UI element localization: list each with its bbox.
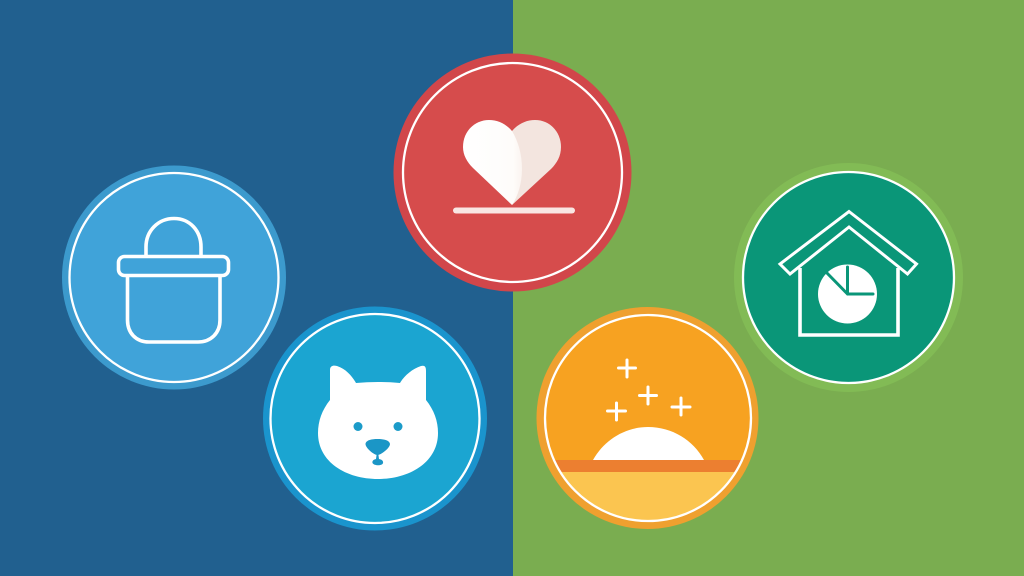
icon: heart badge [394, 54, 632, 292]
icon: basket badge [62, 166, 286, 390]
horizon band [556, 460, 740, 472]
cat eyes [354, 422, 402, 431]
panel: blue left background [0, 0, 513, 576]
icon: house clock badge [734, 163, 963, 392]
clock face [818, 264, 877, 324]
cat head [318, 366, 438, 479]
clock hands [825, 267, 873, 294]
heart left half [463, 120, 522, 205]
icon: cat badge [263, 306, 487, 530]
basket body [128, 276, 220, 342]
panel: green right background [513, 0, 1024, 576]
icon: sunrise badge [536, 307, 758, 529]
cat nose [366, 439, 390, 465]
walls [800, 268, 898, 335]
sun dome [593, 427, 704, 460]
basket handle [146, 218, 201, 256]
roof [780, 212, 916, 274]
sand [562, 472, 734, 520]
sparkles [608, 360, 690, 420]
shelf line [453, 208, 575, 214]
basket rim [118, 256, 228, 276]
heart right half [512, 120, 561, 205]
